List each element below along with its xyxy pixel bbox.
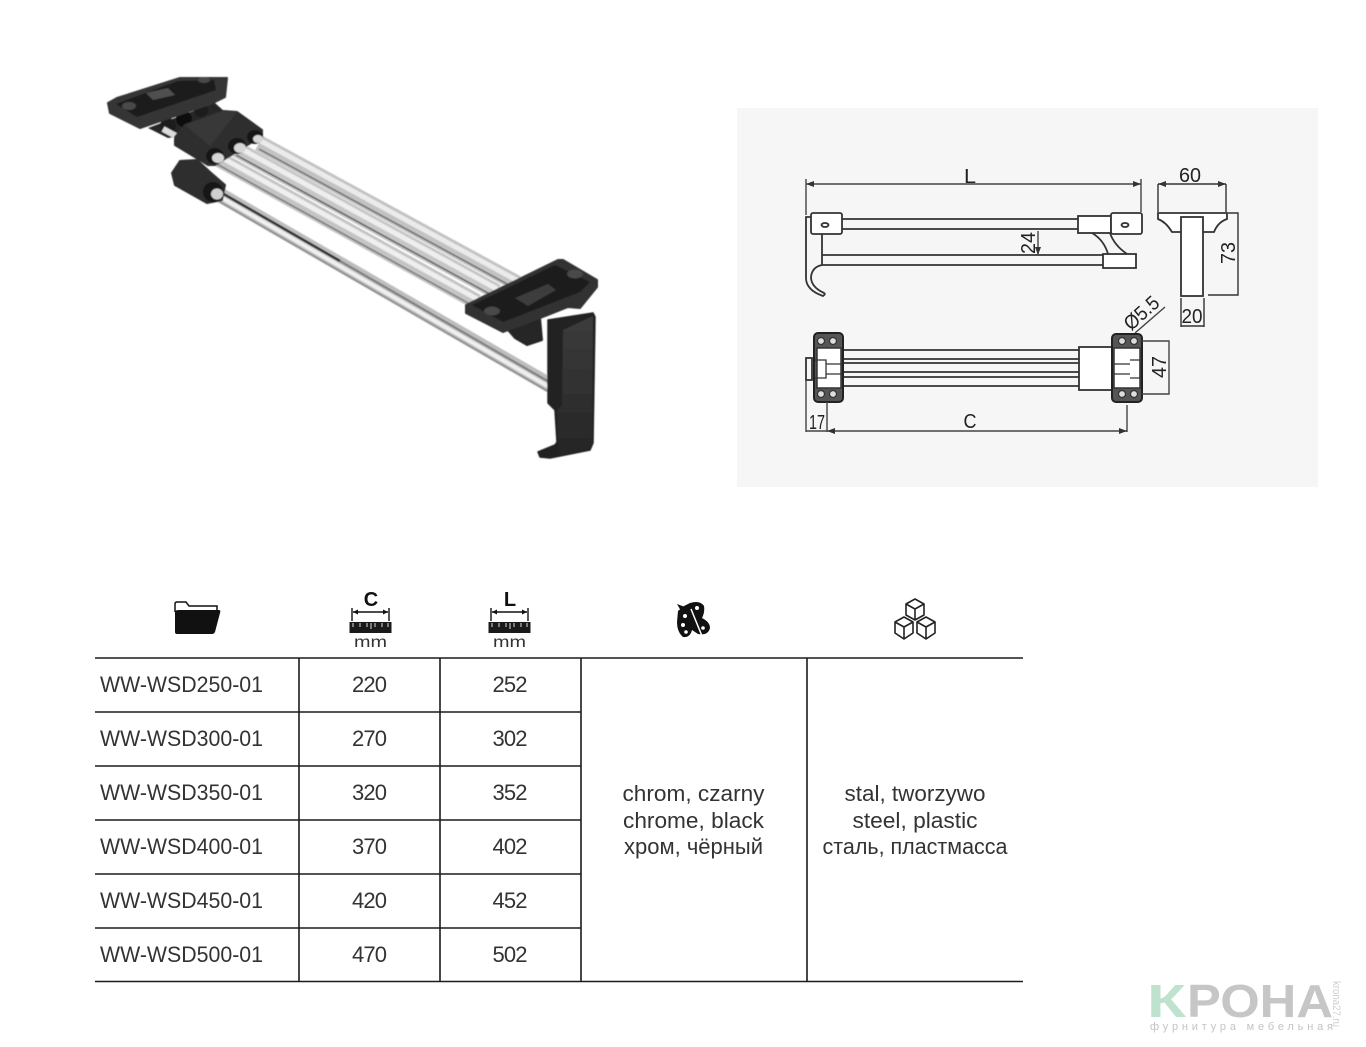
front mounting bracket <box>466 260 597 345</box>
icon: C ruler: mm <box>354 634 387 651</box>
column: L dimension: 252 <box>492 672 528 697</box>
icon: L ruler: L <box>504 589 516 611</box>
drawing labels: 73 <box>1218 242 1240 264</box>
column: material: сталь, пластмасса <box>822 834 1008 859</box>
column: model codes: WW-WSD250-01 <box>100 672 263 697</box>
column: material: steel, plastic <box>852 808 978 833</box>
product photo: pull-out trouser rail <box>108 77 597 458</box>
drawing labels: 20 <box>1182 306 1202 328</box>
panel: technical drawing <box>737 108 1318 487</box>
drawing labels: 60 <box>1179 165 1201 187</box>
icon: palette <box>677 602 710 637</box>
column: C dimension: 220 <box>352 672 387 697</box>
icon: L ruler: mm <box>493 634 526 651</box>
drawing labels: Ø5.5 <box>1120 292 1164 335</box>
rear mounting bracket <box>108 77 227 138</box>
icon: C ruler: C <box>364 589 378 611</box>
icon: C ruler <box>350 589 392 651</box>
lower guide block <box>172 160 225 203</box>
front hook handle <box>538 313 595 458</box>
watermark logo <box>1147 975 1342 1033</box>
drawing labels: L <box>964 166 976 188</box>
column: model codes: WW-WSD300-01 <box>100 726 263 751</box>
column: L dimension <box>492 672 528 967</box>
icon: cubes <box>895 599 935 639</box>
dimension L and 24 <box>806 179 1141 255</box>
column: colour <box>622 781 765 859</box>
icon: L ruler <box>488 589 530 651</box>
column: L dimension: 402 <box>492 834 528 859</box>
top view <box>806 333 1142 402</box>
watermark logo: фурнитура мебельная <box>1150 1021 1333 1033</box>
watermark logo: К <box>1147 975 1187 1027</box>
specification table <box>95 658 1023 982</box>
column: C dimension: 370 <box>352 834 387 859</box>
column: C dimension: 320 <box>352 780 387 805</box>
watermark logo: РОНА <box>1187 975 1333 1027</box>
column: colour: chrom, czarny <box>622 781 764 806</box>
drawing labels: 24 <box>1018 232 1040 254</box>
column: model codes: WW-WSD350-01 <box>100 780 263 805</box>
column: model codes <box>100 672 263 967</box>
column: colour: chrome, black <box>623 808 765 833</box>
column: L dimension: 502 <box>492 942 528 967</box>
column: L dimension: 452 <box>492 888 528 913</box>
drawing labels: C <box>964 411 976 433</box>
drawing labels: 17 <box>809 412 825 434</box>
column: C dimension: 470 <box>352 942 387 967</box>
column: colour: хром, чёрный <box>624 834 763 859</box>
table header icons <box>175 589 935 651</box>
drawing labels <box>809 165 1240 434</box>
column: model codes: WW-WSD500-01 <box>100 942 263 967</box>
table grid <box>95 658 1023 982</box>
column: C dimension <box>352 672 387 967</box>
end view <box>1158 184 1238 327</box>
column: model codes: WW-WSD400-01 <box>100 834 263 859</box>
drawing labels: 47 <box>1149 356 1171 378</box>
column: model codes: WW-WSD450-01 <box>100 888 263 913</box>
column: C dimension: 270 <box>352 726 387 751</box>
dimension 47, 17, C, diameter <box>806 307 1169 432</box>
column: L dimension: 302 <box>492 726 528 751</box>
column: L dimension: 352 <box>492 780 528 805</box>
watermark logo: krona27.ru <box>1330 981 1342 1027</box>
column: material: stal, tworzywo <box>844 781 986 806</box>
side view <box>806 213 1142 296</box>
column: C dimension: 420 <box>352 888 387 913</box>
rail guide block <box>175 111 263 165</box>
column: material <box>822 781 1008 859</box>
chrome rods <box>215 140 551 393</box>
icon: folder <box>175 602 220 634</box>
